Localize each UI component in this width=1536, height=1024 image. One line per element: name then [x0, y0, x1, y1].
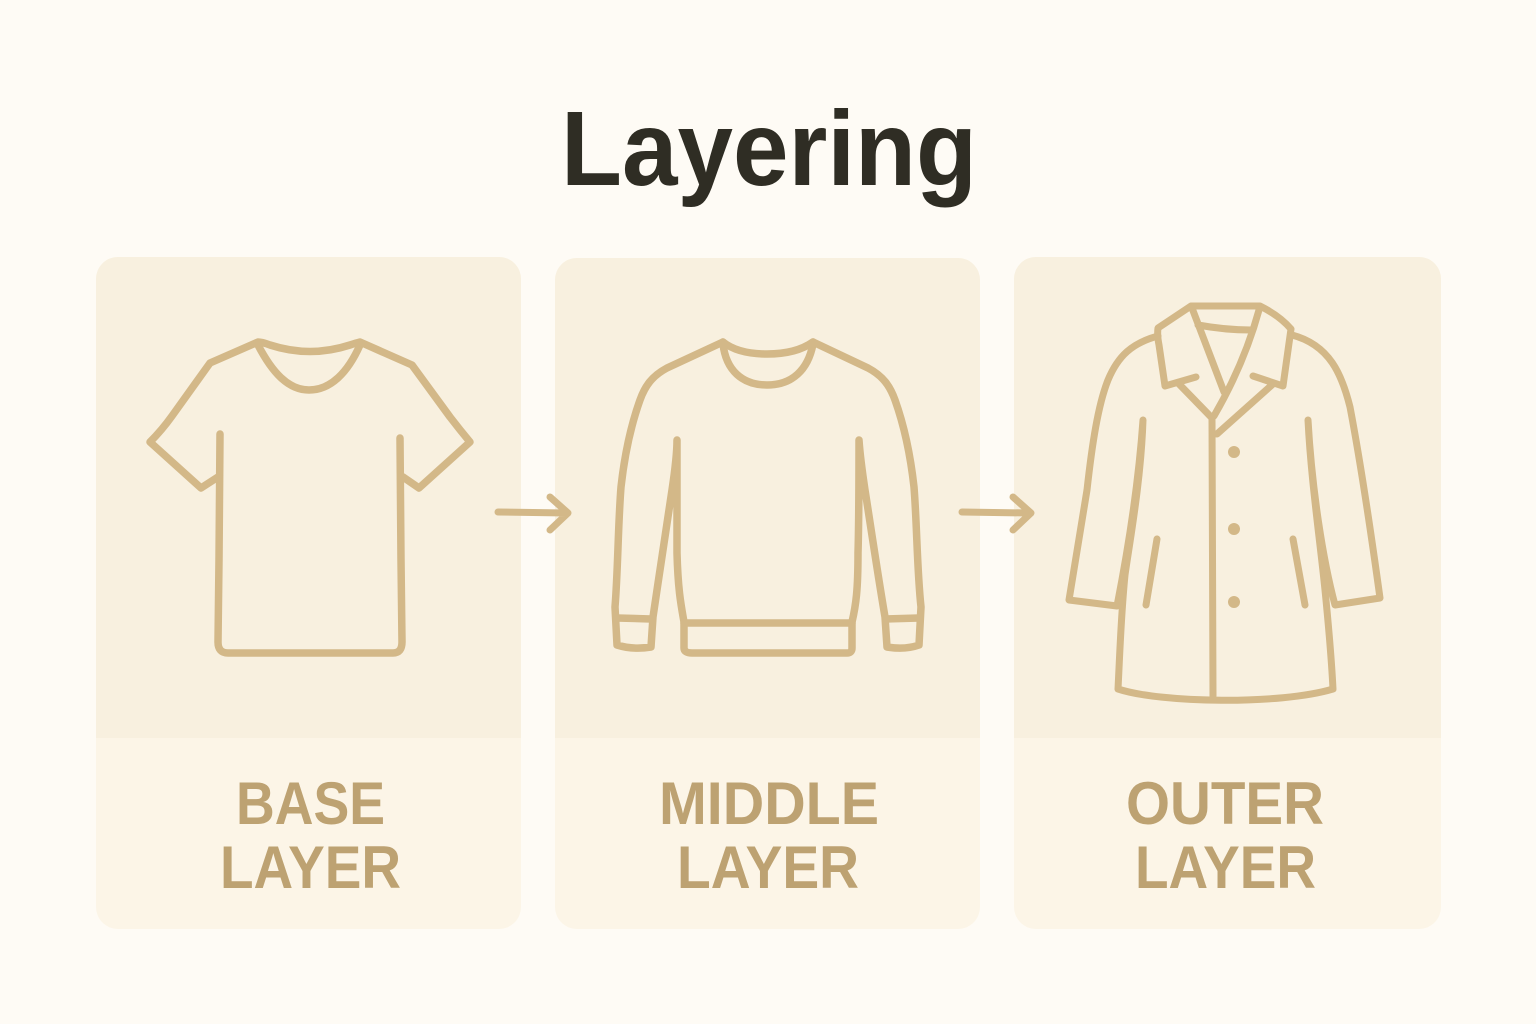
label: outer layer: LAYER	[1135, 834, 1316, 901]
panel: middle layer	[555, 258, 980, 929]
icon: sweater	[615, 342, 921, 653]
arrow: middle to outer	[962, 497, 1031, 530]
label: base layer: BASE	[236, 770, 385, 837]
label: base layer: LAYER	[220, 834, 401, 901]
label: outer layer	[1126, 770, 1324, 901]
panel: outer layer	[1014, 257, 1441, 929]
label: middle layer	[659, 770, 879, 901]
arrow: base to middle	[498, 497, 568, 530]
label: middle layer: MIDDLE	[659, 770, 879, 837]
label: middle layer: LAYER	[677, 834, 859, 901]
title: Layering	[561, 90, 977, 208]
label: base layer	[220, 770, 401, 901]
icon: coat	[1069, 306, 1380, 700]
label: outer layer: OUTER	[1126, 770, 1324, 837]
icon: t-shirt	[150, 342, 470, 653]
panel: base layer	[96, 257, 521, 929]
